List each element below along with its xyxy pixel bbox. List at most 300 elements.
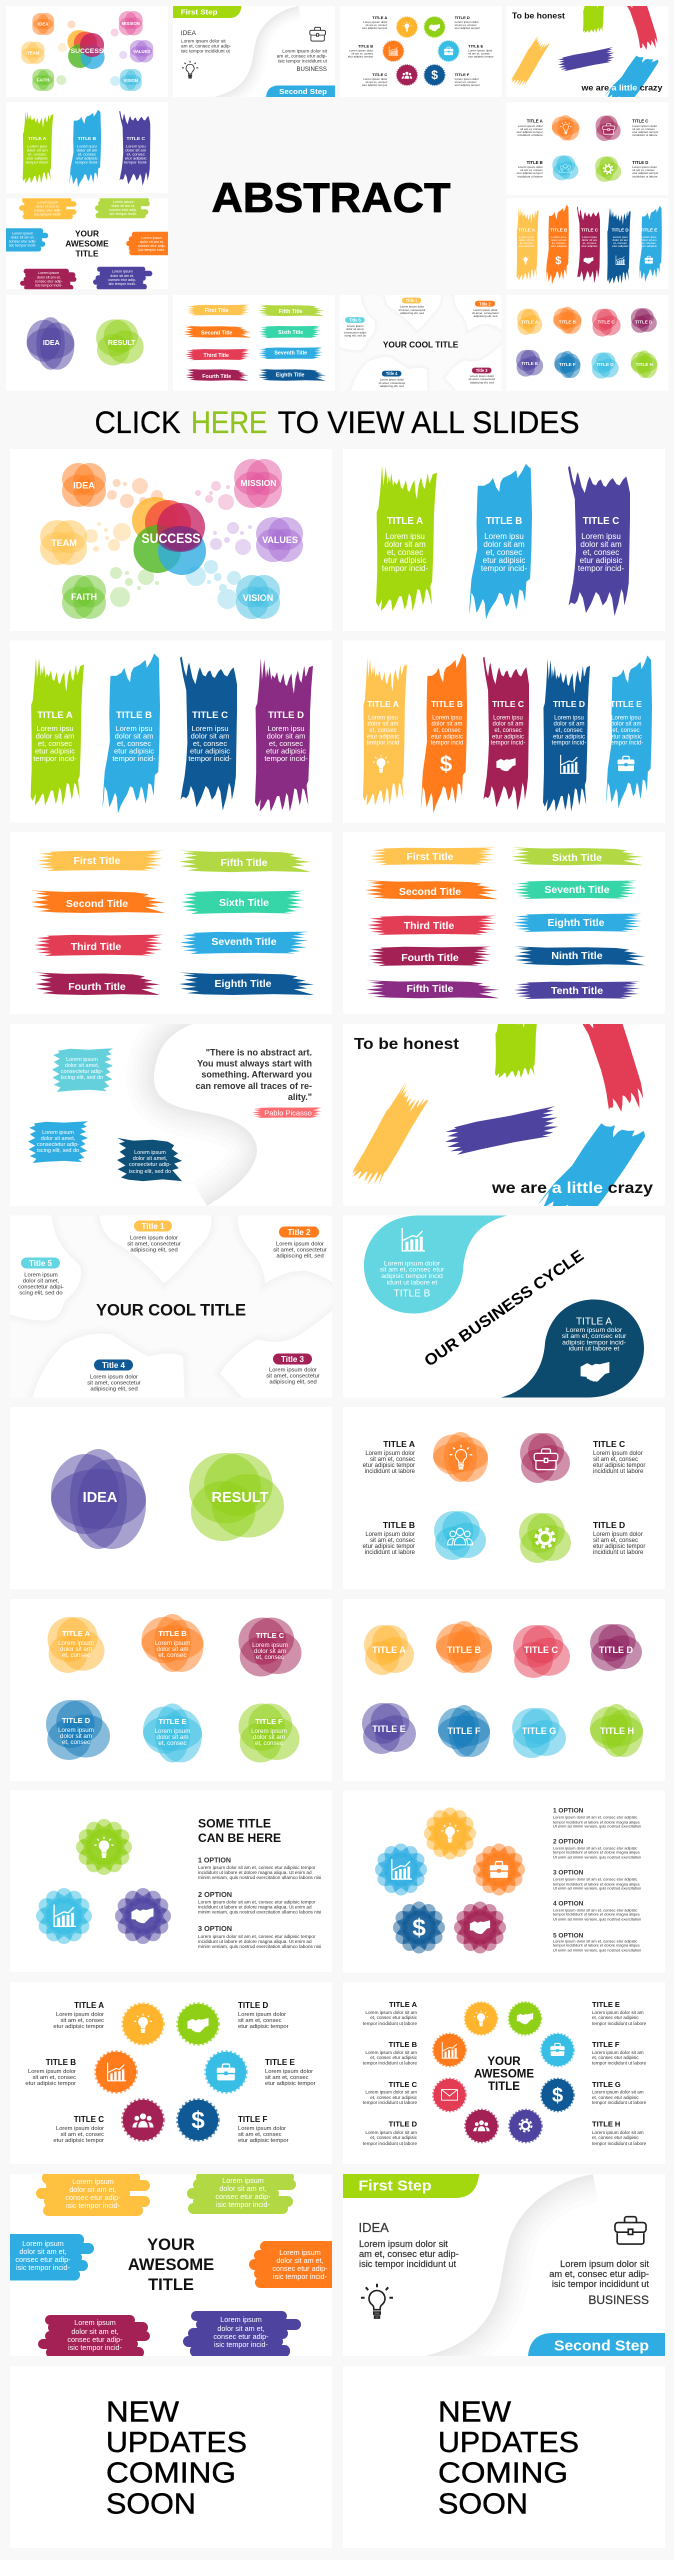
- mini panel: six badges: Lorem ipsum dolor: [468, 49, 492, 52]
- left text list: etur adipisic tempor: [25, 2081, 76, 2087]
- bar text: Lorem ipsum: [22, 2239, 64, 2248]
- right text list: Lorem ipsum dolor sit am: [592, 2090, 644, 2094]
- mini panel: eight blobs: TITLE A: [521, 319, 539, 324]
- mini panel: awesome title with bars: isic tempor incid-: [34, 212, 62, 216]
- option 1: incididunt ut labore et dolore magna aliqua. Ut enim ad: [198, 1870, 312, 1875]
- mini panel: awesome title with bars: isic tempor incid-: [138, 248, 166, 252]
- mini panel: awesome title with bars: Lorem ipsum: [112, 269, 133, 273]
- tab: second step: Second Step: [554, 2338, 649, 2354]
- center title: AWESOME: [128, 2256, 214, 2274]
- badge ring with icons: [433, 2002, 574, 2142]
- mini panel: cool title: sit amet, consectetur: [469, 377, 495, 381]
- blob: title A: [364, 1625, 414, 1675]
- left text list: Lorem ipsum dolor: [28, 2069, 76, 2075]
- right text list: TITLE E: [265, 2058, 295, 2067]
- panel: new updates coming soon right: [343, 2366, 665, 2548]
- text: titles C and D: Lorem ipsum dolor: [593, 1532, 643, 1538]
- badge: dollar: $: [191, 2107, 205, 2134]
- mini panel: awesome title with bars: dolor sit am et,: [140, 240, 164, 244]
- label: title 3: sit amet, consectetur: [266, 1374, 320, 1380]
- mini panel: six badges: TITLE F: [455, 72, 470, 77]
- label: title 4: adipiscing elit, sed: [90, 1386, 138, 1392]
- center title: YOUR: [487, 2056, 521, 2068]
- blob: title D: dolor sit am: [60, 1733, 92, 1740]
- mini panel: six badges: TITLE E: [468, 44, 484, 48]
- left text list: [25, 2001, 104, 2144]
- bar text: Lorem ipsum: [279, 2248, 321, 2257]
- mini panel: awesome title with bars: dolor sit am et,: [37, 275, 61, 279]
- badge: people: [122, 2099, 164, 2141]
- blob: title C: TITLE C: [524, 1645, 558, 1655]
- left text list: tempor incididunt ut labore: [363, 2021, 417, 2026]
- mini panel: four icon blobs: TITLE C: [632, 119, 648, 124]
- brush: title B: Lorem ipsu: [432, 716, 462, 722]
- mini panel: five brush columns: etur adipisic: [551, 244, 567, 248]
- panel: six text blobs: [10, 1599, 332, 1781]
- mini panel: five brush columns: TITLE C: [581, 228, 599, 233]
- label: title 5: Lorem ipsum: [24, 1272, 58, 1278]
- brush: title B: Lorem ipsu: [115, 724, 153, 733]
- quote text: "There is no abstract art.: [206, 1048, 312, 1058]
- option list: 5 OPTION: [553, 1932, 584, 1940]
- label: title 1: adipiscing elit, sed: [130, 1248, 178, 1254]
- mini panel: four icon blobs: incididunt ut labore: [632, 133, 658, 137]
- blob: title A: TITLE A: [372, 1645, 406, 1655]
- right text list: Lorem ipsum dolor: [238, 2012, 286, 2018]
- right text list: tempor incididunt ut labore: [592, 2060, 647, 2066]
- mini panel: five brush columns: dolor sit am: [519, 238, 535, 242]
- center overlapping circles: success: [132, 497, 206, 575]
- mini panel: five brush columns: dolor sit am: [582, 238, 598, 242]
- bar text: isic tempor incid-: [66, 2201, 121, 2210]
- blob: title E: dolor sit am: [157, 1734, 188, 1741]
- blob: gear: [519, 1513, 571, 1563]
- blob: title F: Lorem ipsum: [251, 1728, 287, 1735]
- mini panel: awesome title with bars: dolor sit am et,: [36, 204, 60, 208]
- teardrop: title A: sit am et, consec etur: [562, 1333, 627, 1340]
- left text list: et, consec etur adipisic: [370, 2135, 418, 2140]
- mini panel: awesome title with bars: Lorem ipsum: [141, 236, 162, 240]
- right text list: TITLE F: [592, 2040, 620, 2049]
- brush: second title: Second Title: [399, 886, 461, 898]
- text: business: am et, consec etur adip-: [549, 2269, 649, 2279]
- mini panel: four icon blobs: incididunt ut labore: [518, 133, 543, 137]
- panel: six badges: [10, 1982, 332, 2164]
- bar text: consec etur adip-: [65, 2193, 121, 2202]
- mini panel: four icon blobs: incididunt ut labore: [632, 174, 658, 178]
- brush: title B: [102, 654, 160, 814]
- right text list: etur adipisic tempor: [265, 2081, 316, 2087]
- left text list: TITLE A: [74, 2001, 104, 2010]
- mini panel: five brush columns: TITLE E: [640, 228, 657, 233]
- option list: Ut enim ad minim veniam, quis nostrud exercitation: [553, 1948, 641, 1952]
- mini panel: five brush columns: Lorem ipsu: [582, 235, 597, 239]
- mini panel: awesome title with bars: dolor sit am et,: [111, 204, 135, 208]
- mini panel: cool title: scing elit, sed do: [344, 333, 366, 338]
- label: title 3: Title 3: [281, 1355, 305, 1364]
- brush: title D: tempor incid-: [264, 754, 308, 763]
- brush: title A: etur adipisic: [35, 746, 75, 756]
- right text list: Lorem ipsum dolor sit am: [592, 2050, 644, 2055]
- mini panel: first and second step: First Step: [181, 7, 218, 16]
- mini panel: four icon blobs: sit am et, consec: [632, 168, 655, 172]
- brush: sixth title: Sixth Title: [552, 852, 602, 864]
- option list: Ut enim ad minim veniam, quis nostrud exercitation: [553, 1854, 641, 1860]
- brush: title C: [180, 656, 237, 810]
- mini panel: eight titles: Second Title: [201, 330, 232, 336]
- mini panel: cool title: Lorem ipsum dolor: [400, 305, 424, 309]
- teardrop: title A: Lorem ipsum dolor: [566, 1327, 623, 1334]
- brush: title E: tempor incid-: [609, 740, 643, 746]
- mini panel: five brush columns: Lorem ipsu: [641, 235, 657, 239]
- bar text: dolor sit am et,: [219, 2184, 267, 2193]
- brush: title A: et, consec: [369, 728, 397, 734]
- mini panel: to be honest: we are a little crazy: [580, 84, 663, 92]
- left text list: [363, 2000, 418, 2146]
- label: title 4: sit amet, consectetur: [87, 1380, 141, 1386]
- blob: title E: [143, 1704, 202, 1762]
- mini panel: six badges: etur adipisic tempor: [362, 26, 387, 30]
- brush: seventh title: Seventh Title: [544, 884, 610, 896]
- mini panel: first and second step: am et, consec etur adip-: [277, 54, 327, 58]
- right text list: Lorem ipsum dolor sit am: [592, 2130, 644, 2135]
- mini panel: awesome title with bars: consec etur adip-: [108, 278, 137, 282]
- mini panel: success blobs: VISION: [124, 78, 138, 83]
- mini panel: cool title: adipiscing elit, sed: [380, 384, 404, 388]
- mini panel: four icon blobs: TITLE D: [632, 160, 648, 165]
- brush: title D: et, consec: [555, 728, 583, 734]
- option list: tempor incididunt ut labore et dolore magna aliqua: [553, 1820, 640, 1824]
- brush: eighth title: Eighth Title: [548, 917, 605, 929]
- blob: title E: Lorem ipsum: [155, 1728, 190, 1735]
- brush: fourth title: Fourth Title: [401, 952, 459, 964]
- call to action heading: CLICK: [95, 404, 181, 440]
- brush: title D: Lorem ipsu: [267, 724, 305, 733]
- mini panel: four icon blobs: TITLE A: [527, 119, 543, 124]
- brush: title B: dolor sit am: [483, 540, 525, 549]
- brush note: blue: [28, 1121, 88, 1163]
- bar text: dolor sit am et,: [69, 2185, 117, 2194]
- brush note: cyan: Lorem ipsum: [66, 1057, 98, 1063]
- left text list: sit am et, consec: [32, 2075, 76, 2081]
- text: business: BUSINESS: [588, 2293, 649, 2307]
- badge: briefcase: [205, 2051, 247, 2093]
- text: idea: IDEA: [358, 2220, 389, 2235]
- center title: TITLE: [148, 2276, 194, 2294]
- brush: sixth title: [181, 891, 304, 914]
- mini panel: six badges: etur adipisic tempor: [468, 55, 494, 58]
- brush: title B: et, consec: [433, 728, 461, 734]
- blob: title F: [238, 1704, 300, 1762]
- text: titles C and D: incididunt ut labore: [593, 1550, 644, 1556]
- mini panel: eight blobs: TITLE F: [559, 362, 576, 367]
- blob: result: RESULT: [212, 1490, 269, 1506]
- heading: CAN BE HERE: [198, 1831, 281, 1845]
- text: NEW: [106, 2396, 180, 2428]
- blob: title D: et, consec: [62, 1739, 90, 1746]
- brush: title A: Lorem ipsu: [385, 532, 425, 541]
- mini panel: cool title: sit amet, consectetur: [379, 381, 405, 385]
- option 3: incididunt ut labore et dolore magna aliqua. Ut enim ad: [198, 1939, 312, 1944]
- label: title 3: adipiscing elit, sed: [269, 1380, 317, 1386]
- blob: title C: TITLE C: [256, 1631, 285, 1640]
- mini panel: awesome title with bars: consec etur adip-: [35, 279, 63, 283]
- brush: fourth title: Fourth Title: [68, 981, 126, 993]
- bar block: magenta: [38, 2315, 150, 2358]
- brush: title A: dolor sit am: [384, 540, 426, 549]
- brush: title A: [31, 657, 84, 806]
- center title: AWESOME: [474, 2068, 534, 2080]
- blob: team: [40, 520, 87, 565]
- option 2: incididunt ut labore et dolore magna aliqua. Ut enim ad: [198, 1904, 312, 1910]
- text: titles C and D: etur adipisic tempor: [593, 1544, 645, 1550]
- blob: title G: TITLE G: [522, 1726, 556, 1736]
- brush: fifth title: [179, 850, 311, 872]
- label: title 2: sit amet, consectetur: [273, 1248, 327, 1254]
- panel: three flowers with options: [10, 1790, 332, 1972]
- mini panel: success blobs: [6, 6, 168, 97]
- right text list: TITLE G: [592, 2080, 621, 2089]
- right text list: et, consec etur adipisic: [592, 2015, 639, 2020]
- brush: fourth title: [35, 972, 160, 995]
- blob: title D: TITLE D: [62, 1716, 91, 1725]
- mini panel: success blobs: TEAM: [27, 51, 40, 55]
- mini panel: five brush columns: Lorem ipsu: [519, 235, 534, 239]
- brush: eighth title: Eighth Title: [215, 978, 272, 990]
- mini panel: awesome title with bars: Lorem ipsum: [37, 200, 58, 204]
- mini panel: six badges: [340, 6, 502, 97]
- flower: dollar: $: [412, 1914, 426, 1942]
- text: [438, 2396, 579, 2520]
- brush: title C: tempor incid-: [491, 740, 525, 746]
- bar text: consec etur adip-: [213, 2332, 269, 2341]
- mini panel: success blobs: SUCCESS: [71, 48, 104, 55]
- left text list: TITLE B: [389, 2040, 418, 2049]
- mini panel: awesome title with bars: [3, 197, 172, 290]
- mini panel: four icon blobs: Lorem ipsum dolor: [632, 165, 657, 169]
- label: title 3: Lorem ipsum dolor: [269, 1368, 317, 1374]
- option list: 1 OPTION: [553, 1808, 584, 1814]
- right text list: sit am et, consec: [238, 2018, 282, 2024]
- mini panel: idea and result: [6, 295, 168, 391]
- mini panel: eight titles: First Title: [205, 308, 229, 314]
- brush: title B: dolor sit am: [115, 732, 153, 740]
- blob: title C: [238, 1618, 302, 1676]
- panel: to be honest: [352, 1024, 653, 1206]
- bar text: dolor sit am et,: [71, 2327, 119, 2336]
- right text list: sit am et, consec: [265, 2075, 309, 2081]
- bar text: dolor sit am et,: [19, 2247, 67, 2256]
- heading: To be honest: [354, 1036, 460, 1053]
- brush: title B: [421, 654, 467, 814]
- brush: second title: [31, 890, 165, 913]
- text: business: Lorem ipsum dolor sit: [560, 2259, 649, 2269]
- mini panel: awesome title with bars: consec etur adip-: [9, 239, 37, 243]
- right text list: etur adipisic tempor: [238, 2024, 289, 2030]
- fold swoosh: [137, 1024, 257, 1206]
- right text list: tempor incididunt ut labore: [592, 2021, 647, 2026]
- brush: title C: TITLE C: [492, 699, 524, 709]
- brush: title B: et, consec: [486, 548, 522, 557]
- text: titles A and B: sit am et, consec: [370, 1457, 415, 1463]
- blob: title E: TITLE E: [372, 1724, 406, 1734]
- mini panel: five brush columns: etur adipisic: [581, 244, 598, 248]
- option list: Ut enim ad minim veniam, quis nostrud exercitation: [553, 1824, 641, 1828]
- mini panel: six badges: Lorem ipsum dolor: [363, 77, 387, 81]
- mini panel: five brush columns: TITLE B: [550, 228, 568, 233]
- brush: title C: TITLE C: [192, 710, 228, 721]
- brush: title D: tempor incid-: [552, 740, 586, 746]
- mini panel: cool title: sit amet, consectetur: [472, 311, 499, 315]
- bar block: purple: [183, 2311, 301, 2357]
- option list: 2 OPTION: [553, 1838, 584, 1846]
- left text list: Lorem ipsum dolor sit am: [365, 2010, 417, 2015]
- text: titles A and B: TITLE A: [383, 1439, 415, 1449]
- brush: title E: dolor sit am: [610, 722, 642, 728]
- text: titles A and B: etur adipisic tempor: [363, 1544, 415, 1550]
- text: titles C and D: Lorem ipsum dolor: [593, 1451, 643, 1457]
- panel: awesome title with bars: [4, 2172, 340, 2358]
- option list: Lorem ipsum dolor sit am et, consec etur adipisic: [553, 1876, 637, 1882]
- brush: title A: tempor incid: [367, 740, 399, 746]
- brush: title A: Lorem ipsu: [36, 724, 74, 733]
- mini panel: four icon blobs: Lorem ipsum dolor: [518, 165, 543, 169]
- blob: mission: [234, 459, 282, 508]
- brush: title A: etur adipisic: [384, 556, 426, 565]
- tab: second step: [528, 2333, 665, 2356]
- mini panel: six badges: etur adipisic tempor: [455, 26, 480, 30]
- mini panel: awesome title with bars: consec etur adip-: [34, 208, 62, 212]
- panel: four brush columns: [10, 640, 332, 822]
- mini panel: awesome title with bars: isic tempor incid-: [9, 243, 37, 247]
- mini panel: awesome title with bars: consec etur adip-: [138, 244, 167, 248]
- brush: title B: etur adipisic: [114, 746, 154, 756]
- mini panel: to be honest: [512, 6, 662, 97]
- mini panel: to be honest: To be honest: [512, 12, 565, 20]
- blob: vision: [236, 575, 280, 619]
- left text list: et, consec etur adipisic: [370, 2095, 418, 2100]
- label: title 5: scing elit, sed do: [19, 1290, 63, 1296]
- mini panel: six badges: sit am et, consec: [468, 52, 491, 55]
- mini panel: first and second step: isic tempor incididunt ut: [278, 59, 328, 63]
- blob: title C: dolor sit am: [254, 1648, 286, 1655]
- blob: title D: [590, 1624, 642, 1671]
- mini panel: three brush columns: TITLE C: [127, 136, 145, 142]
- brush: title A: et, consec: [387, 548, 423, 557]
- left text list: sit am et, consec: [60, 2018, 104, 2024]
- brush: title B: TITLE B: [116, 710, 152, 721]
- brush: title A: etur adipisic: [367, 734, 399, 740]
- mini panel: eight blobs: TITLE D: [635, 319, 653, 324]
- brush: title D: etur adipisic: [553, 734, 585, 740]
- label: title 5: consectetur adipi-: [18, 1284, 64, 1290]
- brush: title B: TITLE B: [486, 516, 522, 527]
- label: title 2: Lorem ipsum dolor: [276, 1242, 324, 1248]
- tab: first step: First Step: [358, 2179, 432, 2195]
- teardrop: title B: idunt ut labore et: [387, 1280, 437, 1286]
- option list: Lorem ipsum dolor sit am et, consec etur adipisic: [553, 1908, 637, 1912]
- blob: title C: Lorem ipsum: [252, 1642, 288, 1649]
- left text list: TITLE D: [389, 2120, 418, 2128]
- mini panel: six badges: etur adipisic tempor: [455, 83, 480, 87]
- brush: title B: [469, 464, 532, 619]
- blob: title H: TITLE H: [600, 1726, 634, 1736]
- mini panel: eight titles: Seventh Title: [274, 350, 307, 356]
- badge ring with icons: $: [552, 2085, 563, 2107]
- badge: chart: [95, 2051, 137, 2093]
- panel: your cool title: [18, 1220, 327, 1392]
- label: title 4: Lorem ipsum dolor: [90, 1374, 138, 1380]
- brush: title A: TITLE A: [387, 516, 423, 527]
- teardrop: title B: Lorem ipsum dolor: [384, 1260, 441, 1268]
- panel: three brush columns: [343, 449, 665, 631]
- mini panel: cool title: dolor sit amet,: [346, 327, 364, 331]
- brush: tenth title: Tenth Title: [551, 985, 603, 997]
- badge: handshake: [177, 2003, 219, 2045]
- mini panel: three brush columns: Lorem ipsu: [77, 143, 97, 148]
- blob: people: [434, 1511, 486, 1560]
- brush: title A: tempor incid-: [33, 754, 77, 763]
- mini panel: five brush columns: TITLE A: [518, 228, 536, 233]
- tab: first step: [343, 2174, 479, 2198]
- left text list: Lorem ipsum dolor sit am: [365, 2050, 417, 2055]
- text: titles A and B: etur adipisic tempor: [363, 1463, 415, 1469]
- brush: title C: TITLE C: [583, 516, 619, 527]
- brush: ninth title: Ninth Title: [551, 950, 603, 962]
- brush note: navy: Lorem ipsum: [134, 1150, 166, 1156]
- mini panel: four icon blobs: etur adipisic tempor: [517, 171, 543, 175]
- brush note: cyan: dolor sit amet,: [65, 1063, 100, 1069]
- blob: faith: FAITH: [71, 592, 97, 602]
- bar block: yellow: [36, 2172, 150, 2216]
- brush: title B: tempor incid-: [112, 754, 156, 763]
- blob: values: [256, 517, 303, 562]
- brush: title B: Lorem ipsu: [484, 532, 524, 541]
- mini panel: eight blobs: TITLE H: [636, 362, 653, 367]
- tagline: we are a little crazy: [491, 1180, 653, 1197]
- panel: four icon blobs: [343, 1407, 665, 1589]
- text: UPDATES: [106, 2427, 247, 2459]
- mini panel: cool title: Lorem ipsum: [347, 324, 364, 328]
- mini panel: six badges: Lorem ipsum dolor: [363, 20, 387, 24]
- title: abstract: ABSTRACT: [212, 174, 451, 221]
- mini panel: cool title: Title 5: [349, 317, 361, 323]
- call to action heading: HERE: [191, 404, 267, 440]
- brush note: navy: [117, 1138, 182, 1181]
- label: title 5: Title 5: [29, 1259, 53, 1268]
- blob: bulb: [433, 1432, 488, 1482]
- blob: title C: et, consec: [256, 1654, 284, 1661]
- bar text: consec etur adip-: [215, 2192, 271, 2201]
- mini panel: five brush columns: et, consec: [520, 241, 534, 245]
- mini panel: five brush columns: et, consec: [552, 241, 566, 245]
- brush note: navy: dolor sit amet,: [133, 1156, 168, 1162]
- option 3: [198, 1926, 321, 1949]
- text: titles A and B: [363, 1439, 416, 1556]
- blob: result: [189, 1453, 284, 1541]
- brush: sixth title: Sixth Title: [219, 897, 269, 909]
- brush: fifth title: Fifth Title: [220, 857, 268, 869]
- brush: title B: tempor incid: [431, 740, 463, 746]
- blob: title F: [438, 1705, 490, 1757]
- mini panel: eight titles: Eighth Title: [276, 372, 304, 379]
- brush: title C: etur adipisic: [492, 734, 524, 740]
- brush: title D: et, consec: [269, 739, 303, 748]
- label: title 1: [127, 1220, 181, 1254]
- panel: eight brush titles: [10, 832, 332, 1014]
- option list: Lorem ipsum dolor sit am et, consec etur adipisic: [553, 1814, 637, 1820]
- blob: title E: [362, 1703, 416, 1754]
